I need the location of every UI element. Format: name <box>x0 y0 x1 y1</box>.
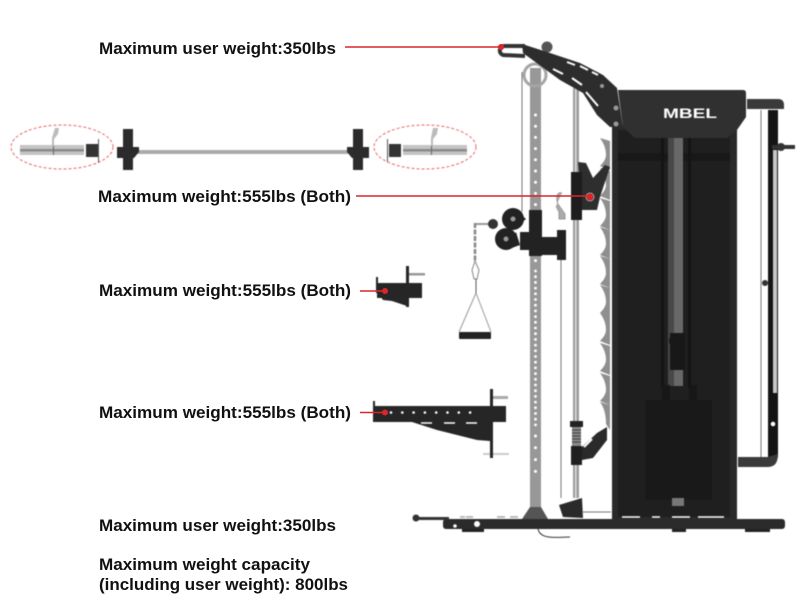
long safety arm bracket <box>373 389 509 458</box>
functional trainer machine <box>412 42 795 537</box>
text: total capacity <box>99 556 348 594</box>
top pulley <box>524 64 546 86</box>
base frame <box>412 514 785 537</box>
callout: J-hook weight: Maximum weight:555lbs (Both) <box>99 282 351 300</box>
text: base user weight: Maximum user weight:350lbs <box>99 517 336 535</box>
right side tubes and bar <box>738 99 795 467</box>
hanging handle with chain <box>459 219 498 339</box>
lower carriage with spring <box>570 421 607 465</box>
bar with end plates <box>117 129 369 170</box>
zoom ellipse: left sleeve <box>11 125 113 169</box>
callout: carriage weight <box>98 188 594 206</box>
zoom ellipse: right sleeve <box>374 125 476 169</box>
pulley carriage <box>495 208 566 260</box>
callout: top handle weight: Maximum user weight:350lbs <box>99 40 336 58</box>
weight horn teeth <box>600 138 610 430</box>
foot bracket <box>559 498 583 518</box>
main weight stack cabinet <box>612 125 737 519</box>
callout: top handle weight <box>99 40 504 58</box>
top arm <box>522 44 623 127</box>
barbell attachment <box>11 125 476 170</box>
text: total capacity: (including user weight): 800lbs <box>99 576 348 594</box>
upper carriage <box>556 162 610 220</box>
text: total capacity: Maximum weight capacity <box>99 556 311 574</box>
brand top plate <box>618 90 746 138</box>
top pull-up handle <box>500 42 552 56</box>
guide rod <box>573 88 579 498</box>
callout: carriage weight: Maximum weight:555lbs (Both) <box>98 188 351 206</box>
cables <box>522 72 761 512</box>
brand logo: MBEL <box>663 105 718 121</box>
rear upright column with holes <box>522 68 548 519</box>
short J-hook bracket <box>376 266 425 307</box>
callout: safety arm weight: Maximum weight:555lbs (Both) <box>99 404 351 422</box>
